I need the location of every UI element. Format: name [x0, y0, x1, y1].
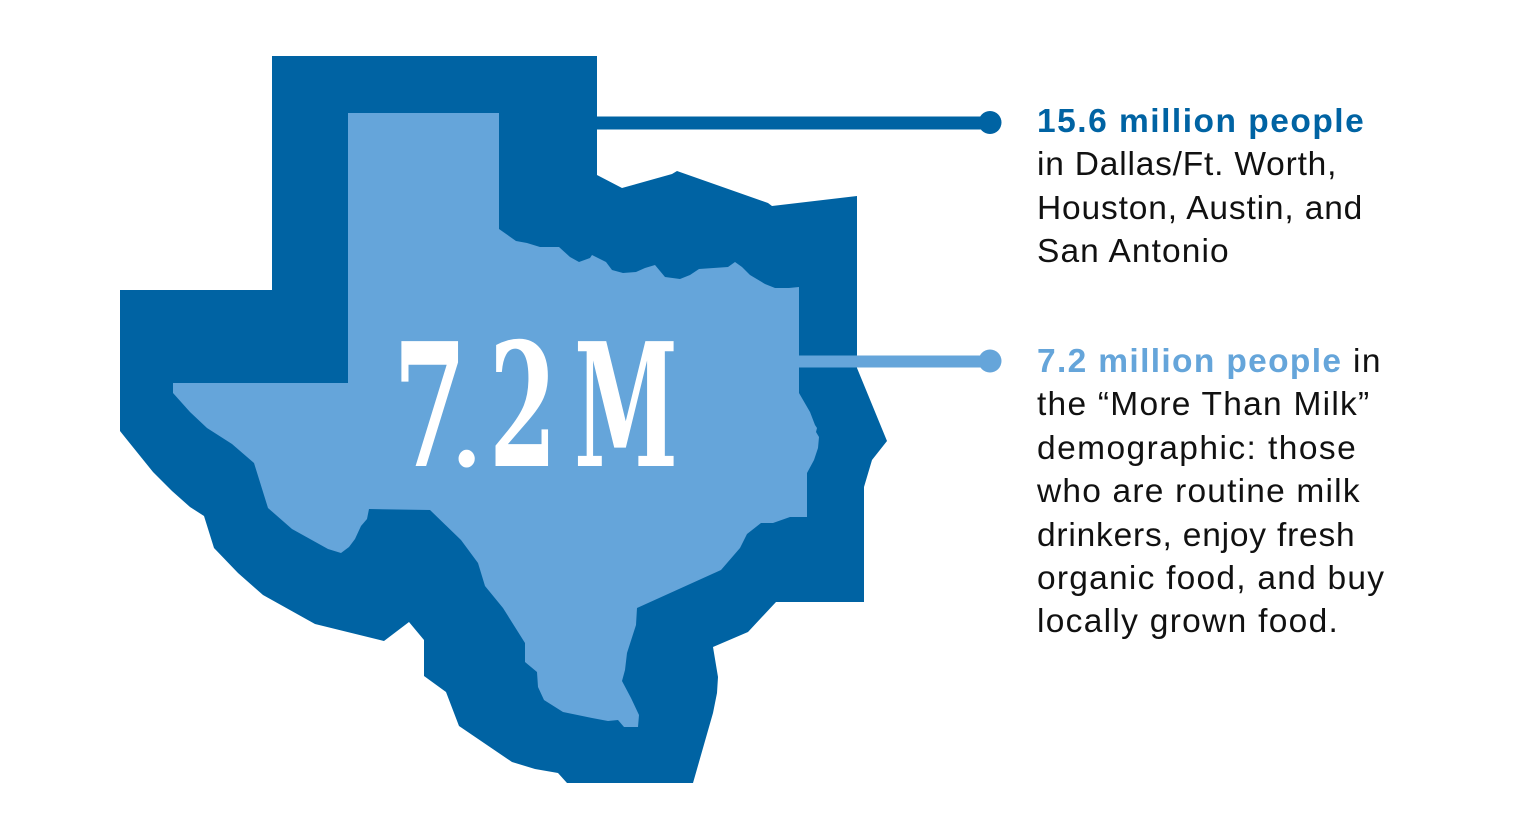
outer texas shape: [120, 56, 887, 783]
big number: 7: [393, 305, 467, 507]
big number: M: [574, 305, 678, 507]
text block: 15.6 million people: San Antonio: [1037, 233, 1230, 270]
connector line dark: [597, 111, 1002, 134]
text block: 7.2 million people: [1037, 343, 1385, 640]
text block: 7.2 million people: the “More Than Milk”: [1037, 386, 1370, 423]
big number: .: [452, 376, 482, 489]
text block: 7.2 million people: locally grown food.: [1037, 603, 1339, 640]
big number: [393, 305, 678, 507]
text block: 7.2 million people: 7.2 million people in: [1037, 343, 1382, 380]
text block: 15.6 million people: 15.6 million people: [1037, 103, 1365, 140]
text block: 15.6 million people: Houston, Austin, and: [1037, 190, 1363, 227]
inner texas shape: [173, 113, 819, 727]
text block: 15.6 million people: in Dallas/Ft. Worth,: [1037, 146, 1337, 183]
big number: 2: [489, 305, 557, 507]
connector line light: [799, 350, 1002, 372]
text block: 7.2 million people: demographic: those: [1037, 430, 1357, 467]
text block: 7.2 million people: who are routine milk: [1037, 473, 1361, 510]
text block: 7.2 million people: drinkers, enjoy fresh: [1037, 517, 1355, 554]
text block: 7.2 million people: organic food, and buy: [1037, 560, 1385, 597]
text block: 15.6 million people: [1037, 103, 1365, 270]
